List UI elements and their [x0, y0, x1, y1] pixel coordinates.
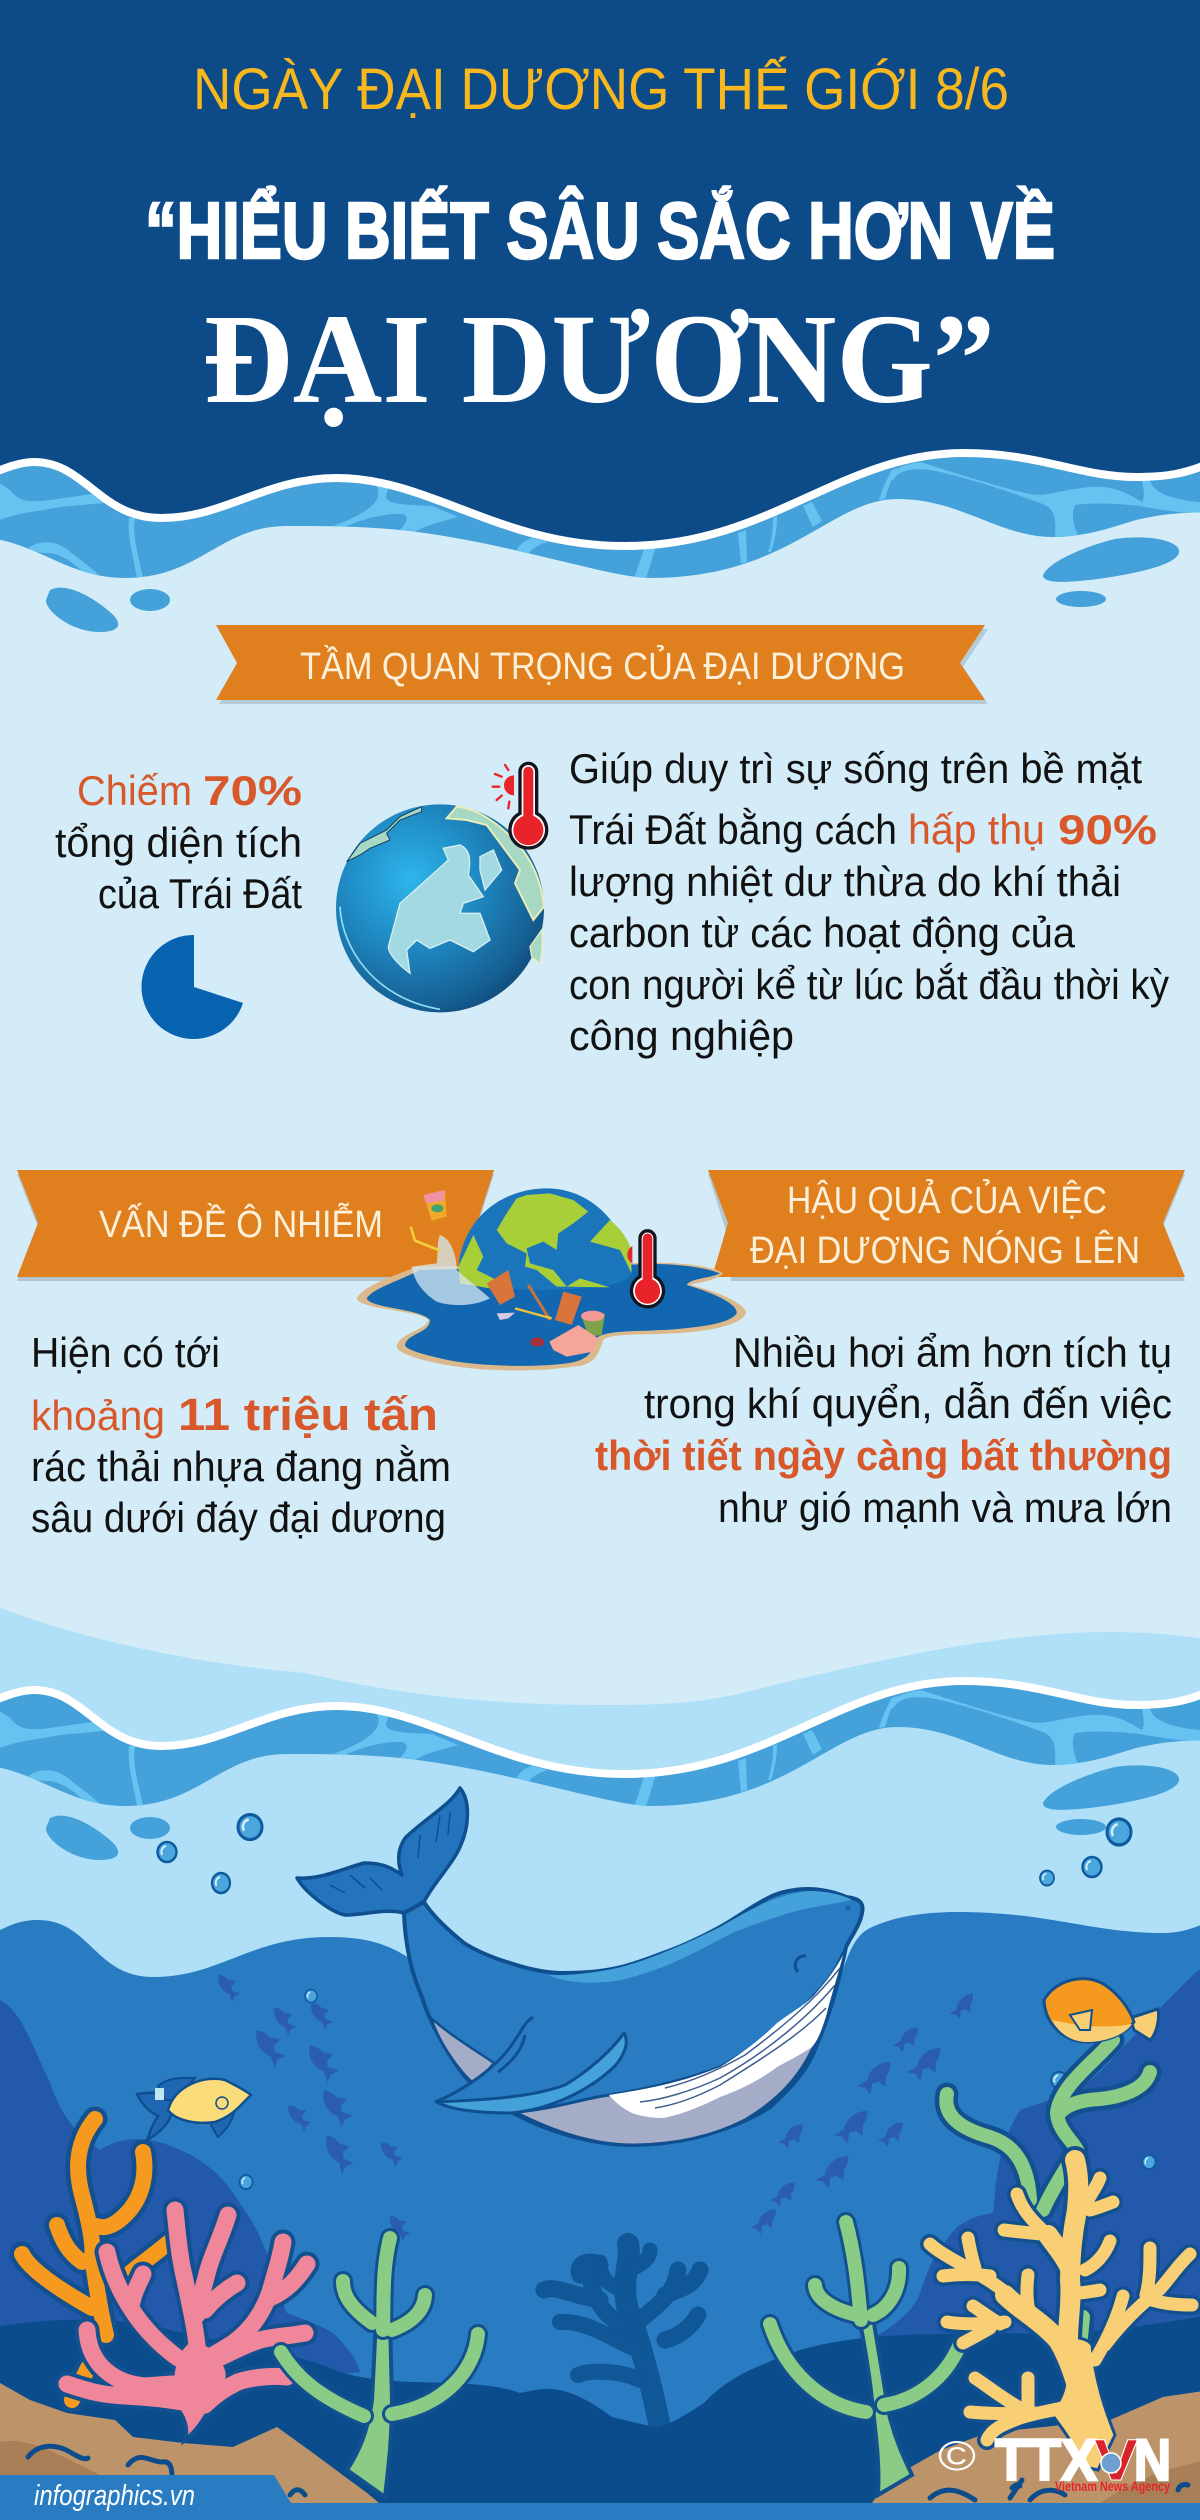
logo: TTXVN: TTX	[995, 2428, 1097, 2493]
silhouette coral	[544, 2244, 700, 2427]
text block: consequences: trong khí quyển, dẫn đến việc	[644, 1380, 1172, 1427]
logo: TTXVN	[938, 2428, 1171, 2494]
text block: consequences: như gió mạnh và mưa lớn	[718, 1484, 1172, 1531]
text block: 11 million tons: khoảng	[31, 1392, 165, 1439]
coral: kelp right	[946, 2040, 1150, 2347]
text block: 11 million tons: rác thải nhựa đang nằm	[31, 1443, 451, 1490]
body	[404, 1889, 863, 2145]
text block: absorbs 90 percent of heat: hấp thụ	[908, 806, 1045, 853]
logo: TTXVN: V	[1094, 2428, 1138, 2493]
belly left sliver	[431, 2018, 494, 2085]
flipper	[435, 2017, 626, 2112]
seabed	[0, 2315, 1200, 2510]
logo: TTXVN: ©	[938, 2432, 976, 2479]
belly gray	[515, 1953, 843, 2145]
second water wave band	[0, 1681, 1200, 1860]
banner: consequences of warming	[708, 1170, 1185, 1281]
title: NGÀY ĐẠI DƯƠNG THẾ GIỚI 8/6	[193, 57, 1009, 122]
fish school	[213, 1969, 980, 2241]
illustration: polluted melting globe	[357, 1188, 746, 1370]
cup in banner	[423, 1190, 447, 1221]
text block: consequences: thời tiết ngày càng bất thường	[595, 1432, 1172, 1479]
banner: pollution	[17, 1170, 494, 1281]
bottom bar	[0, 2503, 1200, 2520]
icon: globe with thermometer	[336, 763, 547, 1012]
coral: yellow	[930, 2160, 1192, 2470]
header panel with top wave	[0, 0, 1200, 632]
belly white	[609, 1955, 843, 2118]
coral: green left	[281, 2238, 478, 2497]
banner: importance of the ocean: TẦM QUAN TRỌNG CỦA ĐẠI DƯƠNG	[300, 644, 905, 688]
source label: infographics.vn: infographics.vn	[34, 2480, 195, 2512]
text block: absorbs 90 percent of heat: công nghiệp	[569, 1012, 794, 1059]
source label: infographics.vn	[0, 2475, 291, 2512]
text block: 70 percent	[55, 767, 302, 917]
text block: 11 million tons	[31, 1329, 451, 1541]
tail	[297, 1788, 468, 1915]
text block: absorbs 90 percent of heat: lượng nhiệt dư thừa do khí thải	[569, 858, 1121, 905]
orange pufferfish	[1044, 1979, 1159, 2042]
coral: orange	[22, 2119, 168, 2400]
text block: 11 million tons: sâu dưới đáy đại dương	[31, 1494, 446, 1541]
background hills	[0, 1960, 1200, 2420]
puddle	[357, 1263, 746, 1370]
text block: absorbs 90 percent of heat: 90%	[1058, 806, 1157, 853]
banner: consequences of warming: ĐẠI DƯƠNG NÓNG LÊN	[750, 1229, 1140, 1272]
eye	[795, 1956, 806, 1972]
coral: green right	[770, 2222, 960, 2495]
thermometer	[627, 1246, 632, 1263]
text block: absorbs 90 percent of heat: Giúp duy trì sự sống trên bề mặt	[569, 745, 1142, 792]
text block: 70 percent: 70%	[203, 767, 302, 814]
text block: 70 percent: của Trái Đất	[98, 870, 302, 917]
text block: 11 million tons: 11 triệu tấn	[178, 1389, 438, 1440]
sea backdrop bottom	[0, 1604, 1200, 2520]
banner: importance of the ocean	[216, 625, 988, 704]
banner: consequences of warming: HẬU QUẢ CỦA VIỆC	[787, 1178, 1107, 1222]
banner: pollution: VẤN ĐỀ Ô NHIỄM	[99, 1202, 383, 1246]
text block: 70 percent: Chiếm	[77, 767, 192, 814]
whale	[297, 1788, 863, 2145]
bubbles	[158, 1814, 1156, 2189]
coral: pink	[67, 2210, 307, 2440]
text block: 70 percent: tổng diện tích	[55, 819, 302, 866]
straw	[411, 1227, 440, 1251]
text block: consequences	[595, 1329, 1172, 1531]
back highlight	[548, 1891, 852, 1983]
title	[145, 57, 1055, 430]
pie chart: 70 percent	[142, 935, 243, 1039]
text block: consequences: Nhiều hơi ẩm hơn tích tụ	[733, 1329, 1172, 1376]
globe dome	[458, 1188, 632, 1290]
plastic bag	[412, 1235, 490, 1305]
text block: absorbs 90 percent of heat: Trái Đất bằng cách	[569, 806, 897, 853]
title: ĐẠI DƯƠNG”	[203, 288, 995, 430]
text block: 11 million tons: Hiện có tới	[31, 1329, 220, 1376]
logo: TTXVN: Vietnam News Agency	[1055, 2478, 1170, 2494]
text block: absorbs 90 percent of heat: carbon từ các hoạt động của	[569, 909, 1076, 956]
logo: TTXVN: N	[1134, 2428, 1171, 2493]
text block: absorbs 90 percent of heat	[569, 745, 1169, 1059]
debris	[487, 1270, 515, 1305]
yellow fish	[137, 2078, 251, 2140]
